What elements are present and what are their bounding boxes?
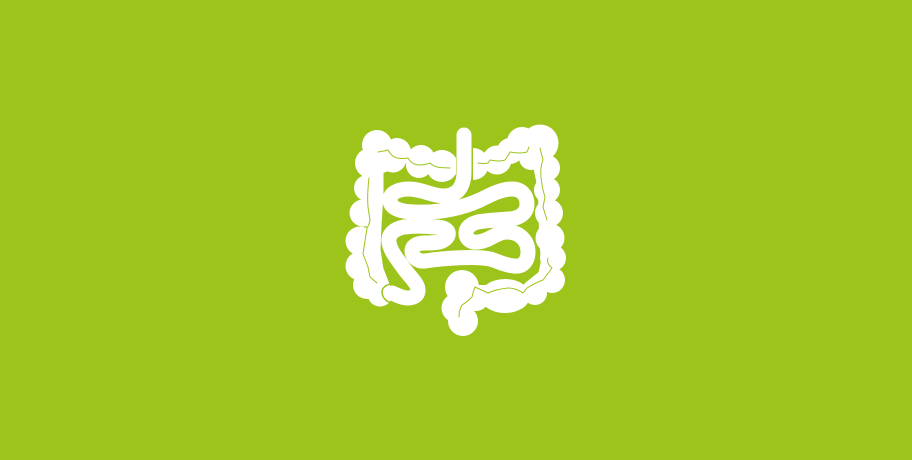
colon: transverse left section <box>355 130 458 182</box>
large intestine: colon <box>346 124 566 336</box>
colon: descending section on the right <box>530 155 566 293</box>
gap around the small intestine tube <box>456 125 473 187</box>
colon fold lines <box>363 147 552 317</box>
gap line around the end of the small intestine <box>382 284 395 302</box>
icon: intestines <box>346 124 566 336</box>
small intestine <box>389 135 528 298</box>
colon: transverse right section <box>457 124 558 180</box>
colon: sigmoid section and rectum <box>442 270 547 336</box>
colon: ascending section on the left <box>346 165 392 306</box>
